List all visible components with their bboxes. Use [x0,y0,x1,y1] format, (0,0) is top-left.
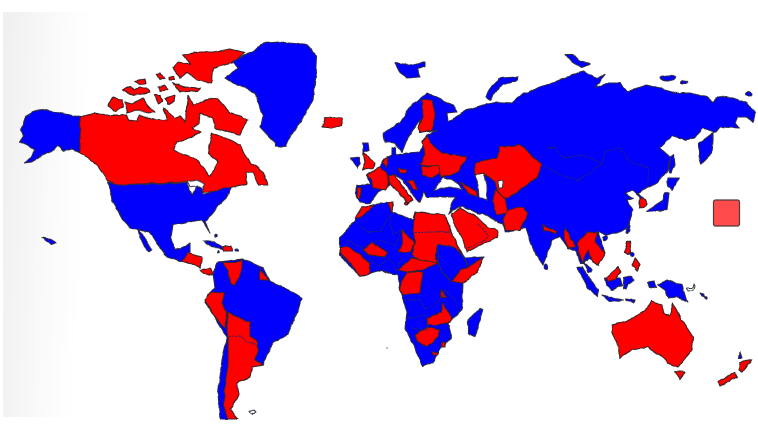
France [367,167,388,190]
Taiwan [625,225,631,233]
Panama and Costa Rica [200,268,213,275]
region: South America [205,259,302,419]
Kamchatka-side Sakhalin island [699,133,713,164]
Caspian Sea [475,173,487,200]
Peru and Ecuador [205,292,227,328]
Sicily [405,202,407,204]
New Zealand South Island [718,372,737,386]
Island: Somerset [173,83,200,92]
Mongolia southern border [540,163,603,180]
background shading [3,12,88,417]
Sulawesi [623,276,634,289]
Austria [398,168,407,173]
Vanuatu [705,297,707,299]
Angola and Congo borders [408,315,428,330]
Lesotho [432,352,438,355]
Myanmar [564,228,575,248]
Tunisia [388,202,393,213]
Hokkaido [667,178,679,190]
Guyana [260,268,268,280]
Ethiopia [438,245,468,282]
Island: Bathurst [135,79,146,85]
Egypt border [415,231,451,233]
Central African Republic [398,258,438,272]
Java [602,295,623,302]
Somalia [452,257,484,283]
Portugal [357,187,361,198]
Eurasia landmass [355,71,755,265]
Sumatra [577,267,598,297]
Iceland [322,117,342,128]
Hainan [603,236,607,240]
Tasmania [675,371,685,379]
South Korea [639,198,647,208]
Philippines south [632,258,640,271]
United States [108,182,232,262]
Bolivia border [229,336,258,345]
region: Asia-Pacific islands [544,54,752,386]
Chad [398,230,415,252]
region: Africa [340,202,484,366]
Finland [418,100,435,133]
Wrangel islet [680,80,688,84]
Southern African borders [405,290,458,310]
Afghanistan and Pakistan [503,207,528,230]
Novaya Zemlya [486,77,518,100]
Burkina Faso and Niger [363,242,387,257]
legend swatch: red [714,200,740,226]
Philippines north [625,241,631,254]
Island: Cornwallis [156,73,165,80]
Honshu [647,192,669,212]
Thailand, Laos, Vietnam [577,232,605,265]
Cuba [203,241,225,250]
Greenland [225,42,317,147]
Africa landmass [340,202,484,366]
Philippines centre [630,252,634,256]
Great Britain [362,152,375,170]
Venezuela [222,260,243,285]
Rwanda [440,290,446,297]
Central African borders [370,258,402,270]
Belgium [382,157,388,167]
Bolivia, Paraguay, Argentina [224,312,263,419]
Island: Victoria [125,98,155,113]
Oman border [478,224,488,235]
Svalbard [395,62,425,78]
Namibia and Botswana [415,327,440,347]
Lesser Sunda [625,299,635,302]
Hispaniola [223,246,232,251]
Island: Prince of Wales [165,95,175,105]
Madagascar [468,308,483,337]
Island: Axel [158,85,168,91]
Alaska [20,109,80,163]
Romania and Hungary [422,165,440,178]
Australia [612,301,693,367]
Ellesmere and Devon islands [173,49,245,83]
Sarawak [606,267,621,281]
Swaziland [442,342,445,347]
Baltics and Belarus [420,135,467,177]
Island: Banks [108,97,123,112]
New Zealand North Island [739,360,752,372]
Egypt, Sudan and Eritrea [412,212,461,265]
Nepal and Bangladesh [542,225,557,234]
region: Eurasia [355,71,755,265]
Aegean and Balkans [407,180,418,190]
Bahamas [215,235,217,237]
Jamaica [217,251,219,253]
Island: Melville [123,86,150,95]
Russia-Mongolia-China border [547,147,648,190]
Black Sea [434,177,462,190]
Borneo [605,278,622,290]
Central America [182,253,202,268]
Algeria and Mali borders [345,215,402,248]
Baja California [138,230,152,252]
Italy [388,175,413,203]
South America landmass [205,259,302,419]
Sakhalin [669,155,675,173]
Wrangel Island [746,92,752,96]
Hawaii [42,237,56,245]
Aral Sea [498,180,503,189]
West Africa coast [340,247,370,277]
Island: King William [155,95,163,104]
speck near Africa [386,347,388,349]
Malay peninsula [584,263,592,272]
New Siberian Islands [660,76,676,80]
Northland [739,352,742,358]
Yemen border [468,235,489,248]
Island: Devon small [169,77,175,80]
West New Guinea [647,281,656,288]
Falkland Islands [249,410,256,414]
Zambia and Malawi [427,303,452,325]
Arctic islands [108,49,245,113]
Solomon Islands [700,293,705,297]
New Guinea [658,280,687,302]
Caucasus [460,182,477,197]
Ireland [351,157,360,168]
Bismarck [687,284,695,291]
Morocco [355,205,375,218]
DR Congo [400,272,423,295]
region: North America [20,49,268,275]
African borders [345,215,458,330]
Scotland [363,143,369,152]
Arabian Peninsula [451,208,498,252]
Severnaya Zemlya [565,54,590,68]
Kazakhstan [475,145,542,198]
Canada mainland [80,95,268,193]
Uzbekistan [493,190,508,215]
Great Lakes [187,180,205,190]
Puerto Rico [235,249,239,251]
Sri Lanka [544,264,548,270]
region: Europe islands [322,62,518,170]
